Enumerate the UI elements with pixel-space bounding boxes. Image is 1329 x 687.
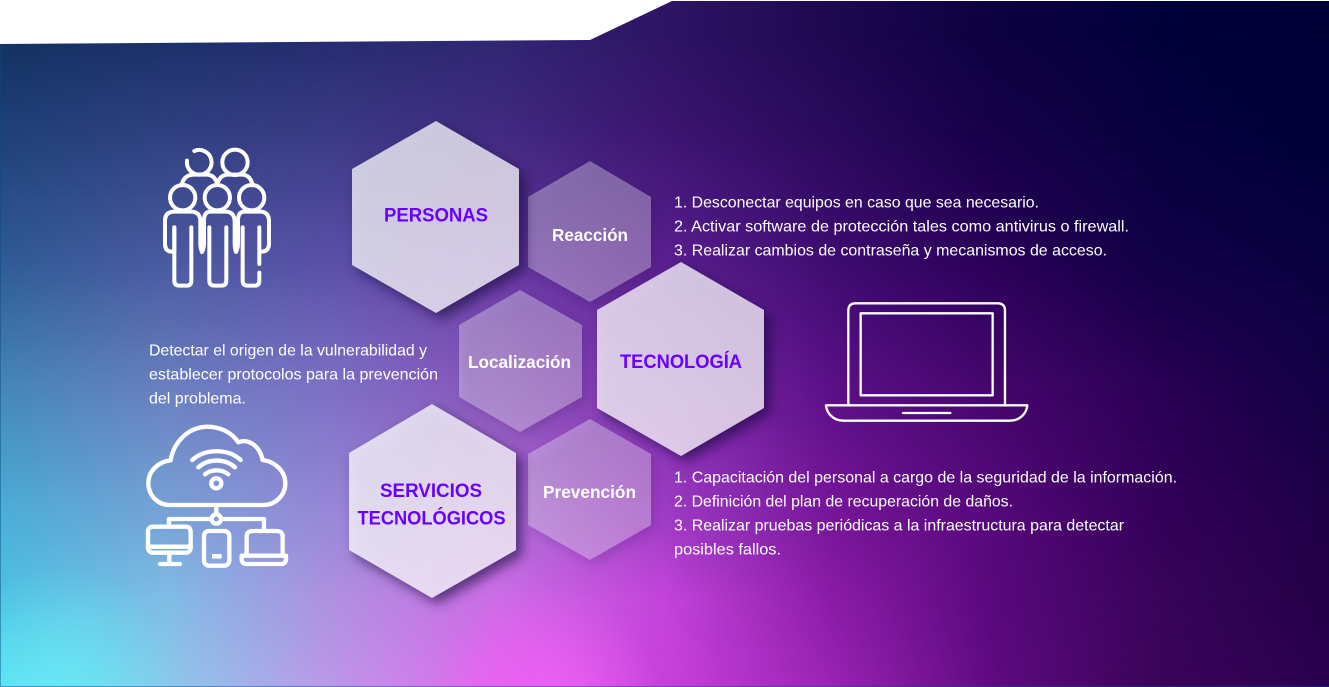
text: Reacción steps: 2. Activar software de protección tales como antivirus o firewall.: [674, 219, 1129, 236]
hexagon: Localización: [459, 290, 582, 432]
hexagon: TECNOLOGÍA: [597, 262, 764, 456]
hexagon: Reacción: [528, 161, 651, 302]
text: Localización description: establecer protocolos para la prevención: [149, 366, 438, 384]
text: Prevención steps: 3. Realizar pruebas periódicas a la infraestructura para detectar: [674, 518, 1125, 535]
hexagon: SERVICIOS TECNOLÓGICOS: [349, 404, 516, 598]
text: Prevención steps: 1. Capacitación del personal a cargo de la seguridad de la información.: [674, 470, 1177, 487]
hexagon: PERSONAS: [352, 121, 519, 313]
icon: cloud network: [148, 427, 286, 566]
text: Localización description: [149, 342, 438, 408]
hexagon: TECNOLOGÍA: TECNOLOGÍA: [620, 351, 742, 373]
hexagon: Prevención: Prevención: [543, 482, 636, 502]
icon: laptop: [826, 303, 1027, 421]
hexagon: SERVICIOS TECNOLÓGICOS: SERVICIOS: [380, 481, 482, 502]
icon: group of people: [165, 150, 269, 286]
text: Localización description: del problema.: [149, 390, 246, 408]
text: Reacción steps: 1. Desconectar equipos en caso que sea necesario.: [674, 195, 1039, 212]
hexagon: PERSONAS: PERSONAS: [384, 206, 488, 226]
hexagon: Prevención: [528, 419, 651, 560]
hexagon: Localización: Localización: [468, 352, 571, 372]
text: Prevención steps: 2. Definición del plan de recuperación de daños.: [674, 494, 1013, 511]
text: Localización description: Detectar el origen de la vulnerabilidad y: [149, 342, 427, 360]
text: Prevención steps: posibles fallos.: [674, 542, 781, 559]
text: Prevención steps: [674, 470, 1177, 559]
hexagon: Reacción: Reacción: [552, 225, 628, 245]
white top notch: [0, 0, 1329, 44]
hexagon: SERVICIOS TECNOLÓGICOS: TECNOLÓGICOS: [358, 508, 506, 530]
text: Reacción steps: [674, 195, 1129, 260]
text: Reacción steps: 3. Realizar cambios de contraseña y mecanismos de acceso.: [674, 243, 1107, 260]
